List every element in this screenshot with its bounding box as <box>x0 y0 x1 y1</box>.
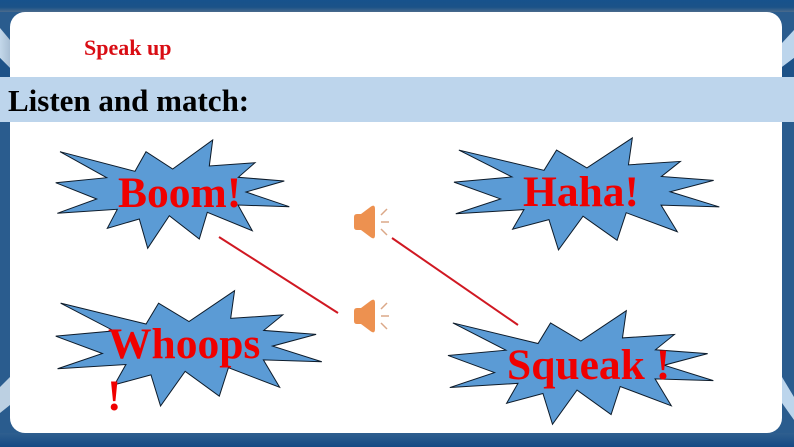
icon: speaker top <box>354 206 389 238</box>
burst: Whoops: ! <box>107 372 122 420</box>
burst: Squeak: Squeak ! <box>507 341 670 389</box>
icon: speaker bottom <box>354 300 389 332</box>
section label: Speak up <box>84 35 171 60</box>
burst: Boom: Boom! <box>118 169 241 217</box>
instruction band: Listen and match: <box>8 83 249 118</box>
burst: Squeak <box>448 311 713 424</box>
burst: Whoops <box>56 291 322 420</box>
burst: Haha: Haha! <box>523 168 639 216</box>
line: Squeak to top speaker <box>392 238 518 325</box>
instruction band <box>0 77 794 122</box>
burst: Whoops: Whoops <box>108 320 260 368</box>
line: Boom to bottom speaker <box>219 237 338 313</box>
burst: Boom <box>56 140 289 248</box>
burst: Haha <box>454 138 719 250</box>
